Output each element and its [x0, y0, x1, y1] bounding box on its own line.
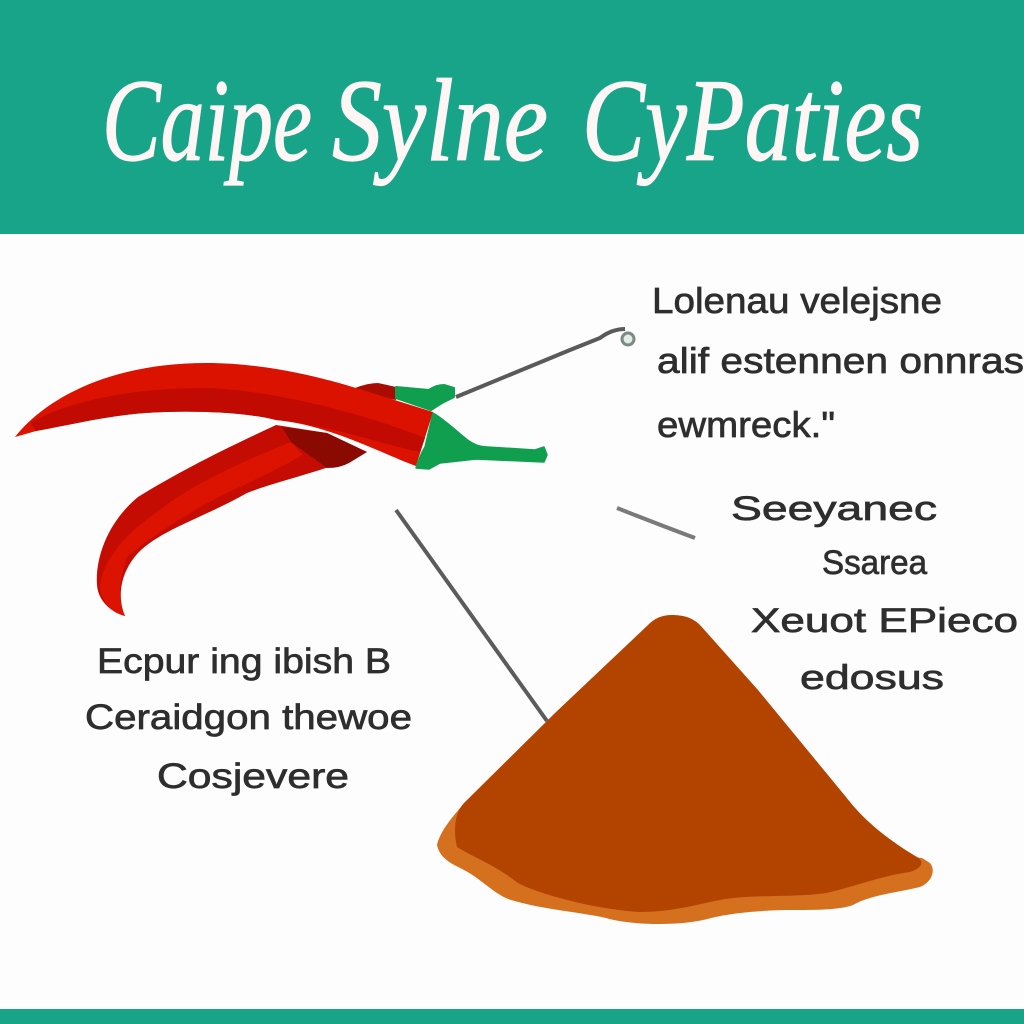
upper pepper dark band: [31, 388, 425, 452]
callout text: lower left: Ceraidgon thewoe: [85, 698, 412, 737]
callout text: middle right: Xeuot EPieco: [751, 602, 1018, 640]
lower stem: [416, 413, 547, 469]
powder cone: [455, 615, 921, 912]
leader line: middle right: [617, 508, 695, 538]
leader line: top right: [456, 329, 634, 397]
title: [102, 55, 923, 186]
title: Caipe: [102, 55, 312, 186]
powder base: [437, 808, 933, 924]
callout text: middle right: Ssarea: [822, 544, 927, 582]
callout text: lower left: Cosjevere: [157, 757, 349, 796]
callout text: top right: ewmreck.": [657, 404, 835, 445]
icon: red chili peppers: [15, 363, 547, 616]
bottom bar: [0, 1009, 1024, 1024]
lower pepper light band: [100, 442, 303, 616]
callout text: lower left: [85, 642, 412, 796]
callout text: middle right: Seeyanec: [731, 490, 937, 528]
lower pepper: [97, 425, 367, 616]
callout text: lower left: Ecpur ing ibish B: [97, 642, 391, 681]
header banner: [0, 0, 1024, 234]
callout text: top right: alif estennen onnras: [657, 340, 1024, 381]
pepper overlap shadow: [282, 427, 367, 468]
callout text: top right: [652, 280, 1024, 445]
back shade near stem: [355, 383, 396, 400]
top stem: [396, 385, 454, 410]
leader line: to powder: [396, 510, 547, 721]
icon: powder pile: [437, 615, 933, 924]
callout text: top right: Lolenau velejsne: [652, 280, 942, 321]
upper pepper: [15, 363, 433, 466]
callout text: middle right: edosus: [800, 659, 944, 697]
title: Sylne: [332, 55, 548, 186]
callout text: middle right: [731, 490, 1018, 697]
title: CyPaties: [582, 55, 923, 186]
